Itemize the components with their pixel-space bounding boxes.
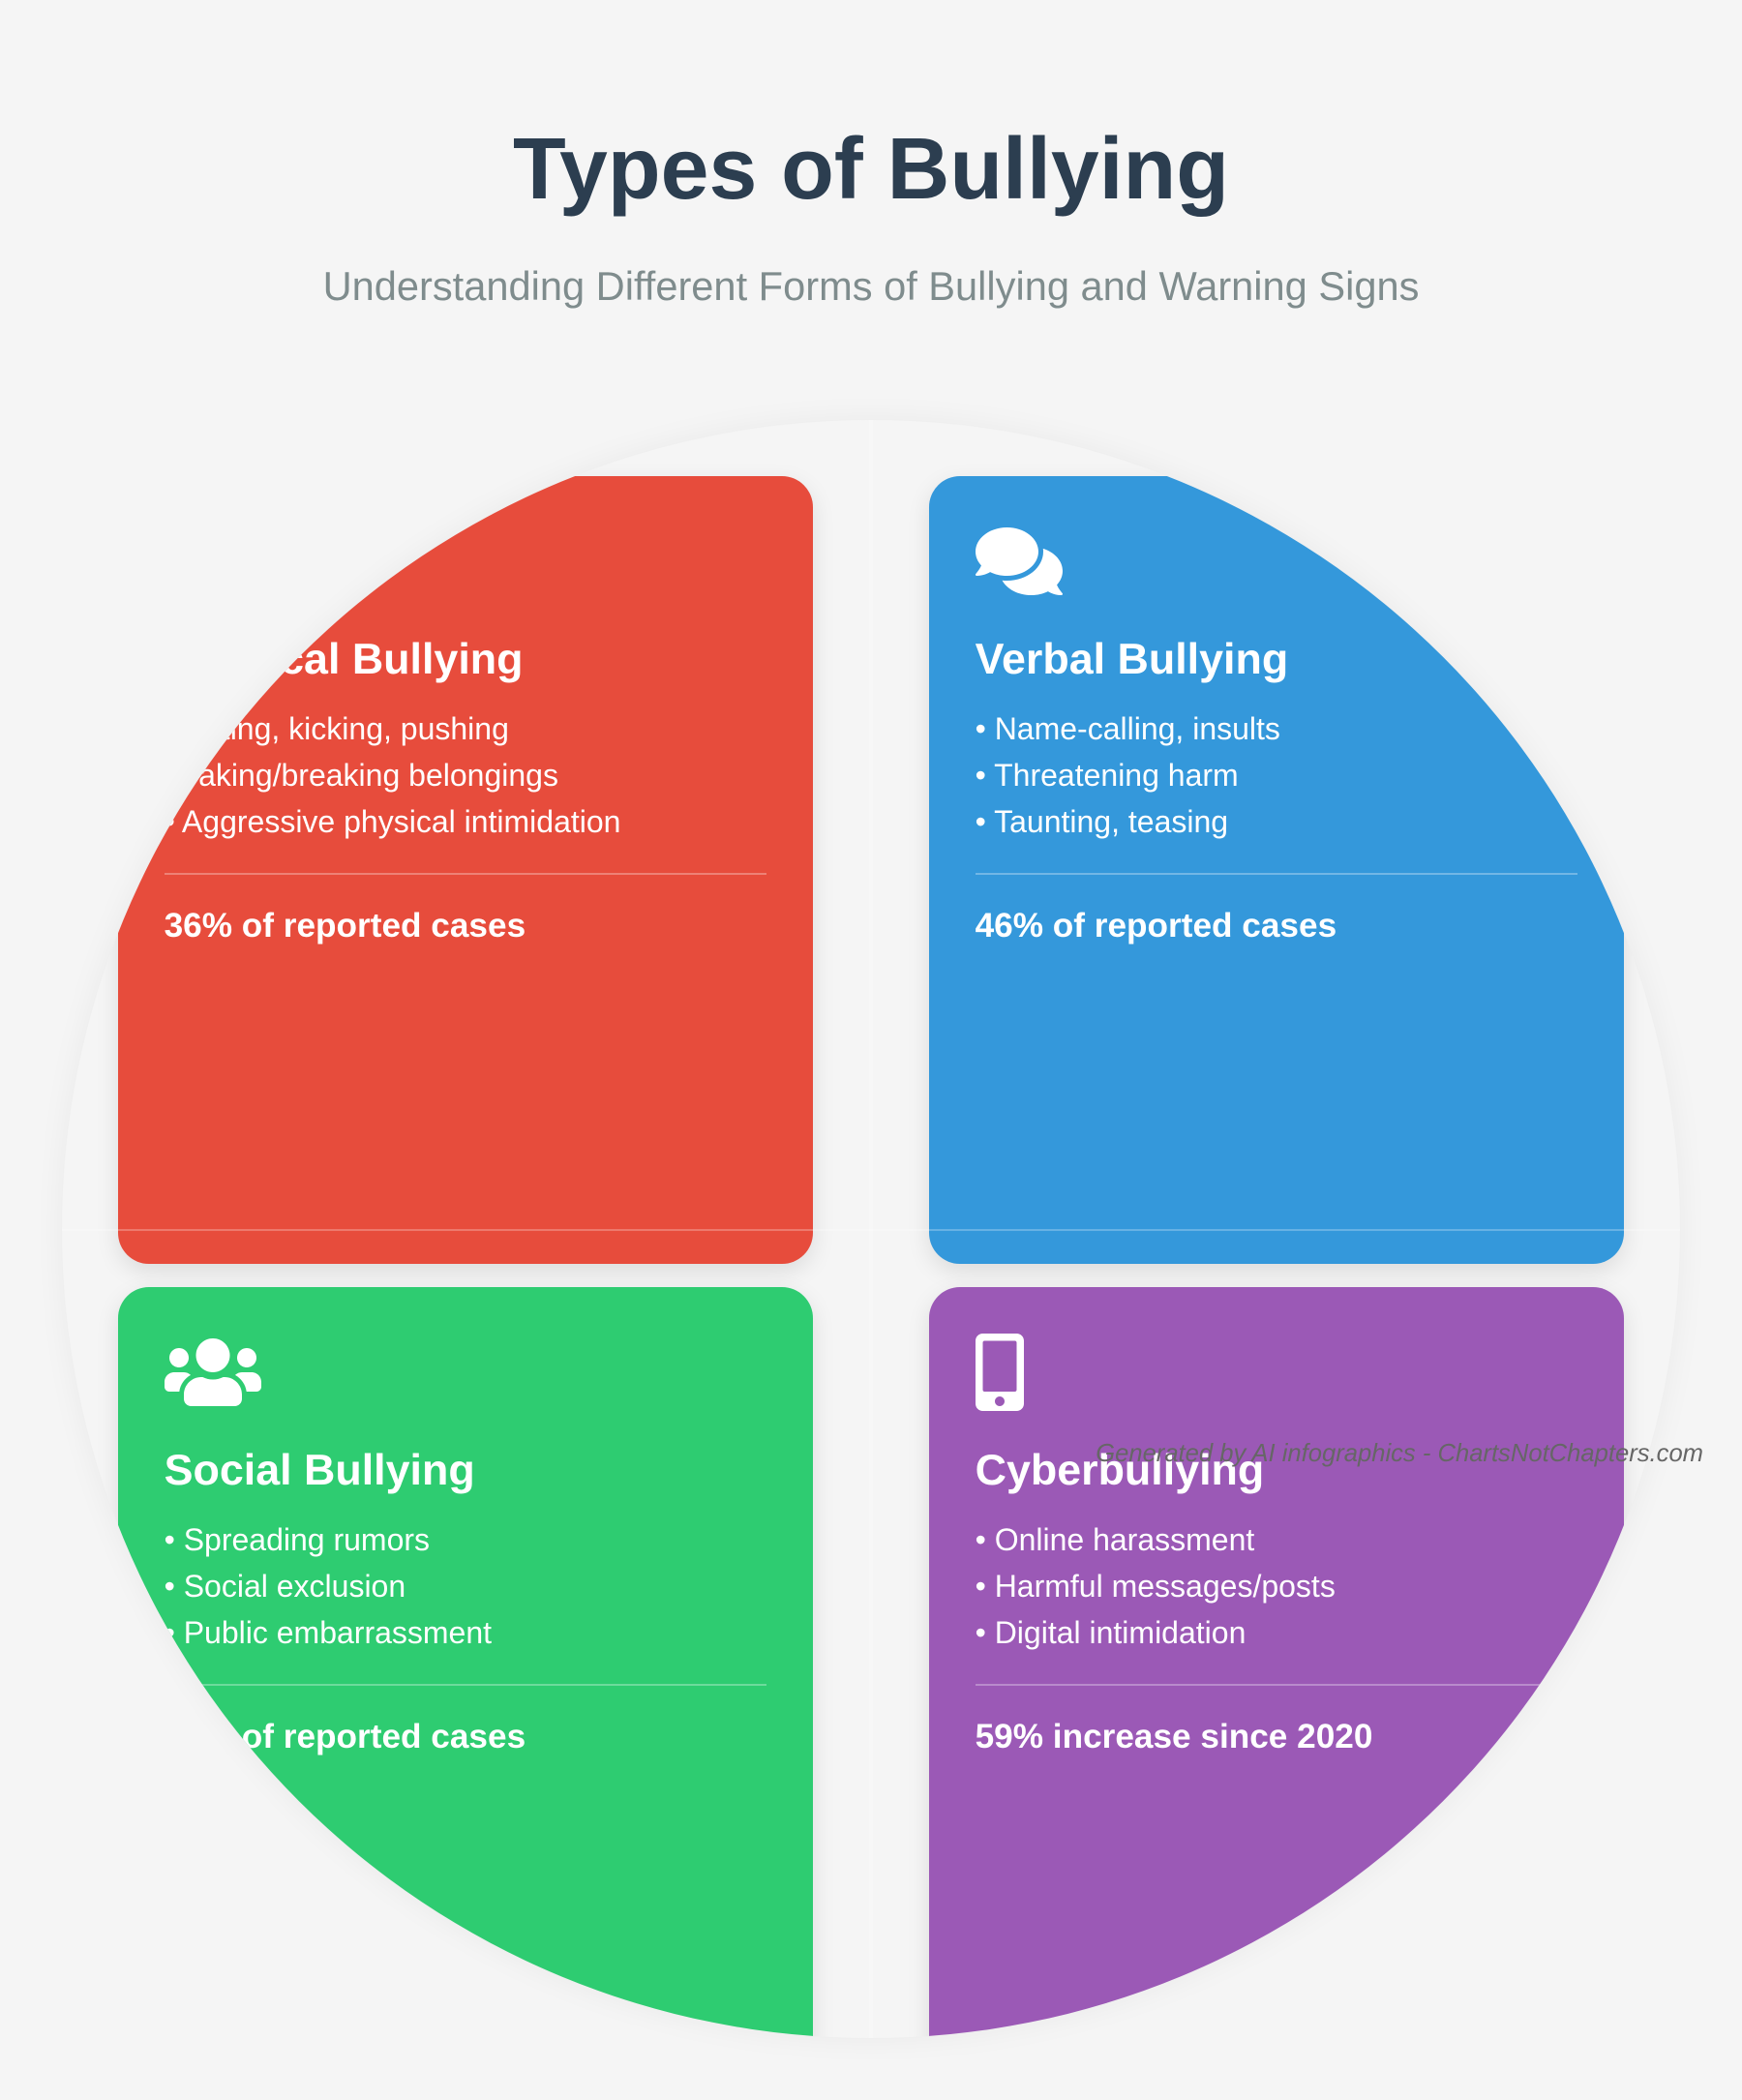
list: verbal bullying signs [976, 716, 1279, 838]
subtitle: Understanding Different Forms of Bullying and Warning Signs [323, 263, 1419, 309]
list: cyberbullying signs: • Harmful messages/posts [976, 1569, 1336, 1604]
title: Types of Bullying [513, 120, 1229, 217]
list: cyberbullying signs: • Digital intimidation [976, 1615, 1246, 1650]
list: verbal bullying signs: • Threatening harm [976, 758, 1239, 793]
heading: verbal bullying: Verbal Bullying [976, 635, 1288, 683]
panel: verbal bullying [929, 476, 1624, 1264]
list: verbal bullying signs: • Name-calling, insults [976, 711, 1280, 746]
list: physical bullying signs: • Aggressive physical intimidation [165, 804, 620, 839]
list: cyberbullying signs: • Online harassment [976, 1522, 1254, 1557]
heading: social bullying: Social Bullying [165, 1446, 475, 1494]
heading: cyberbullying: Cyberbullying [976, 1446, 1264, 1494]
list: physical bullying signs [169, 716, 619, 838]
panel: social bullying [118, 1287, 813, 2075]
list: verbal bullying signs: • Taunting, teasing [976, 804, 1228, 839]
list: physical bullying signs: • Hitting, kicking, pushing [165, 711, 509, 746]
list: social bullying signs: • Social exclusion [165, 1569, 405, 1604]
stat: verbal bullying: 46% of reported cases [976, 907, 1337, 945]
stat: physical bullying: 36% of reported cases [165, 907, 526, 945]
list: cyberbullying signs [976, 1527, 1335, 1649]
panel: cyberbullying [929, 1287, 1624, 2075]
icon: speech bubbles [976, 527, 1063, 595]
circular panel group [113, 476, 1629, 2036]
list: social bullying signs [165, 1527, 492, 1643]
heading: physical bullying: Physical Bullying [165, 635, 524, 683]
footer credit: Generated by AI infographics - ChartsNotChapters.com [1096, 1440, 1703, 1467]
icon: group of people [165, 1338, 261, 1406]
list: physical bullying signs: • Taking/breaking belongings [165, 758, 558, 793]
stat: social bullying: 31% of reported cases [165, 1718, 526, 1755]
icon: mobile phone [976, 1334, 1024, 1411]
background circle [62, 420, 1680, 2038]
list: social bullying signs: • Public embarrassment [165, 1615, 492, 1650]
stat: cyberbullying: 59% increase since 2020 [976, 1718, 1372, 1755]
list: social bullying signs: • Spreading rumors [165, 1522, 430, 1557]
panel: physical bullying [118, 476, 813, 1264]
